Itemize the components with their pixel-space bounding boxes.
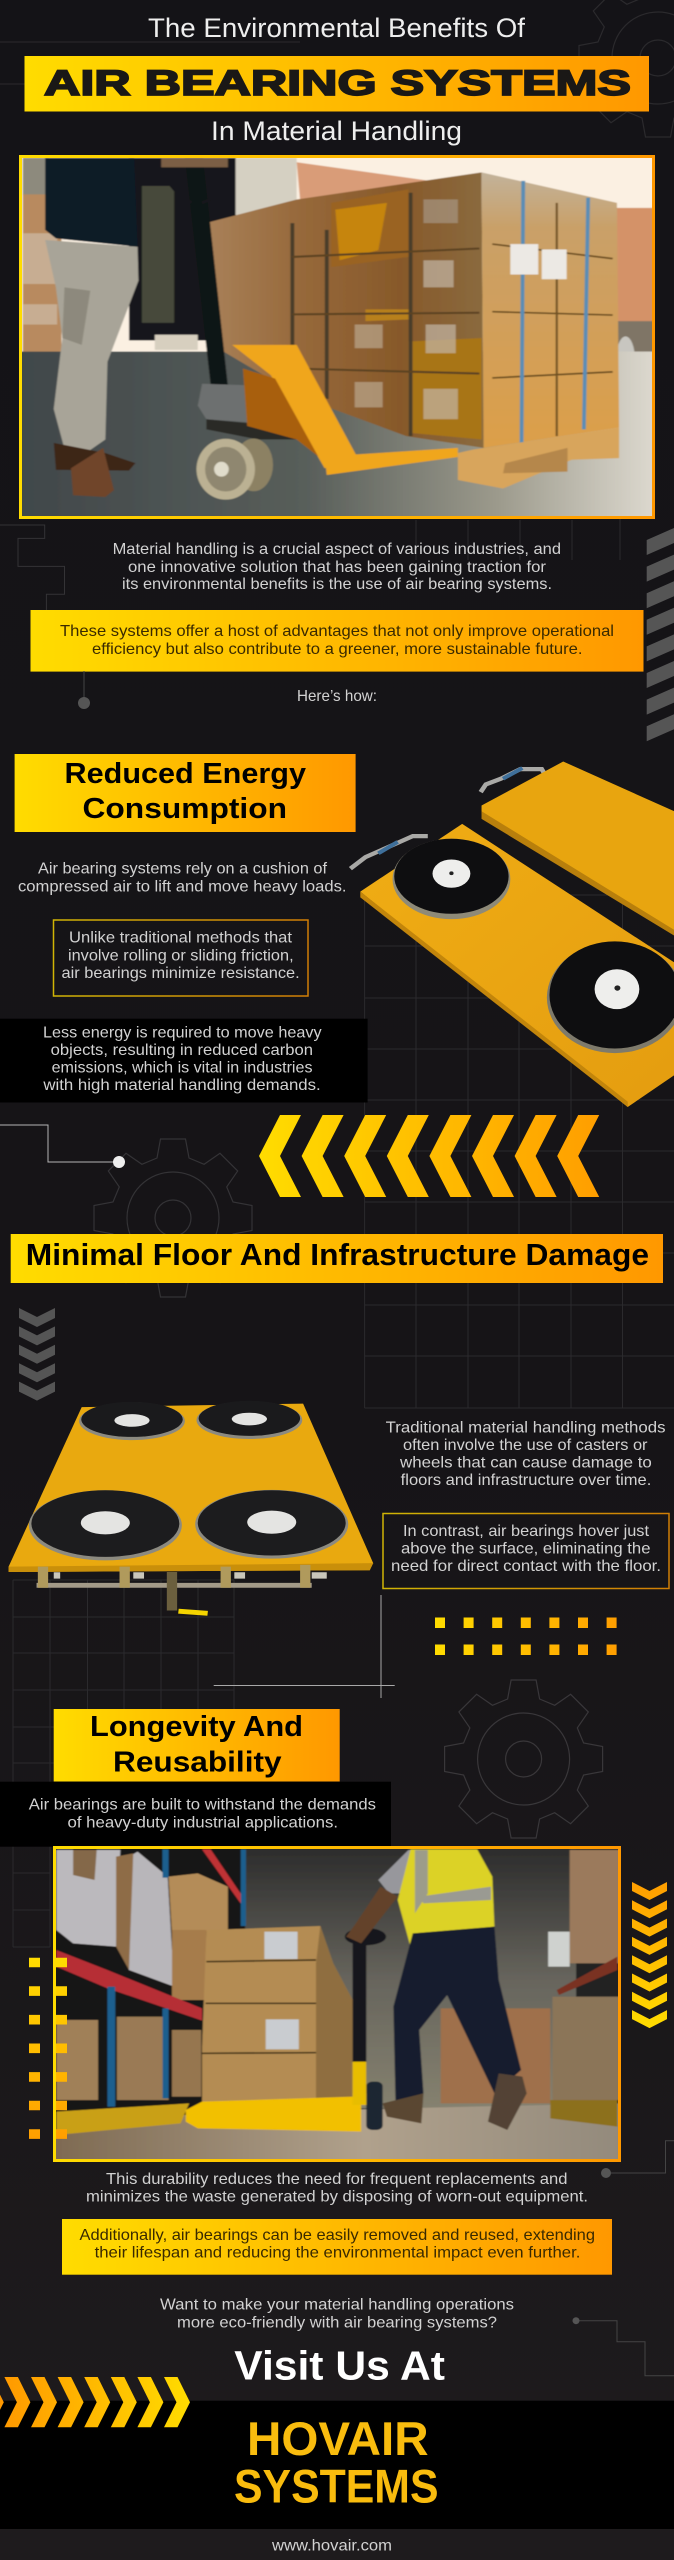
black band: brand: HOVAIR [247,2412,429,2465]
heading: reduced energy consumption: Consumption [82,793,287,825]
title line 1: The Environmental Benefits Of [148,13,526,43]
text: here's how: Here’s how: [297,688,377,705]
gear decoration: top right [579,0,674,137]
heading: longevity and reusability: Longevity And [90,1711,303,1743]
text: compressed air [18,861,346,896]
heading: longevity and reusability [54,1709,340,1782]
text: traditional methods: Traditional material handling methods [386,1419,666,1436]
text: call to action: more eco-friendly with air bearing systems? [177,2314,497,2331]
circuit decoration: top left [0,525,64,610]
outlined callout: hover above surface [383,1514,669,1588]
right-pointing chevrons [0,2377,190,2427]
heading banner: minimal floor damage [11,1234,663,1283]
heading: reduced energy consumption [15,754,356,832]
photo: worker with pallet jack and wrapped boxes [17,156,658,521]
outlined callout: friction: involve rolling or sliding friction, [68,948,294,964]
black panel: less energy: objects, resulting in reduced carbon [51,1042,313,1059]
black panel: heavy-duty: of heavy-duty industrial applications. [68,1814,338,1831]
black panel: less energy: emissions, which is vital in industries [52,1060,312,1077]
outlined callout: hover above surface: In contrast, air bearings hover just [403,1523,650,1540]
gear decoration: lower right [445,1680,603,1838]
highlight callout: reuse [62,2219,612,2275]
text: call to action: Want to make your material handling operations [160,2296,514,2313]
yellow square dots [435,1618,617,1655]
intro paragraph [113,541,561,593]
outlined callout: hover above surface: above the surface, eliminating the [401,1541,651,1558]
text: compressed air: compressed air to lift and move heavy loads. [18,879,346,896]
black band: brand: SYSTEMS [234,2460,438,2513]
text: compressed air: Air bearing systems rely on a cushion of [38,861,328,878]
highlight callout: advantages: efficiency but also contribute to a greener, more sustainable future. [92,641,582,658]
diagonal stripes: right edge [647,528,674,741]
gear decoration: middle left [94,1139,252,1297]
yellow square columns over photo [29,1958,67,2139]
heading: reduced energy consumption: Reduced Energy [64,758,306,790]
black panel: less energy: Less energy is required to move heavy [43,1024,322,1042]
title banner: AIR BEARING SYSTEMS [44,64,631,103]
left-pointing chevrons [259,1115,599,1197]
circuit line with white dot [0,1125,125,1168]
yellow down chevrons right [632,1882,667,2028]
black panel: heavy-duty [0,1782,391,1847]
image: two yellow air bearing plates [350,762,674,1107]
highlight callout: advantages: These systems offer a host of advantages that not only improve operational [60,623,614,640]
photo: worker pushing boxes in warehouse [54,1847,621,2163]
text: call to action [160,2296,514,2331]
text: traditional methods: floors and infrastructure over time. [401,1472,651,1489]
image: four-disc air bearing plate [9,1401,373,1613]
heading: visit us at: Visit Us At [234,2342,445,2388]
outlined callout: friction: air bearings minimize resistance. [62,965,300,982]
heading banner: minimal floor damage: Minimal Floor And Infrastructure Damage [26,1237,649,1272]
crosshair lines [214,1595,395,1698]
outlined callout: friction: Unlike traditional methods that [69,930,293,946]
text: traditional methods: often involve the use of casters or [403,1437,648,1454]
highlight callout: reuse: their lifespan and reducing the environmental impact even further. [95,2245,580,2262]
intro paragraph: its environmental benefits is the use of air bearing systems. [122,576,552,593]
title banner [24,56,649,112]
text: traditional methods [386,1419,666,1489]
circuit decoration with dot [78,671,90,709]
highlight callout: reuse: Additionally, air bearings can be easily removed and reused, extending [80,2227,595,2244]
circuit decoration: lower right 1 [601,2141,674,2178]
black panel: heavy-duty: Air bearings are built to withstand the demands [29,1796,376,1813]
outlined callout: friction [54,920,308,996]
heading: longevity and reusability: Reusability [113,1747,282,1779]
black panel: less energy [0,1019,368,1102]
text: traditional methods: wheels that can cause damage to [399,1454,652,1471]
black band: brand [0,2401,674,2529]
intro paragraph: Material handling is a crucial aspect of various industries, and [113,541,561,558]
black panel: less energy: with high material handling demands. [42,1077,321,1094]
title line 3: In Material Handling [211,116,462,146]
gray down chevrons [19,1308,55,1401]
intro paragraph: one innovative solution that has been gaining traction for [128,559,547,576]
highlight callout: advantages [30,610,644,672]
text: durability [86,2171,588,2206]
text: durability: minimizes the waste generated by disposing of worn-out equipment. [86,2189,588,2206]
circuit decoration: lower right 2 [572,2317,674,2376]
footer url: www.hovair.com [271,2538,392,2555]
outlined callout: hover above surface: need for direct contact with the floor. [391,1558,661,1575]
text: durability: This durability reduces the need for frequent replacements and [106,2171,568,2188]
background grid decoration [0,42,674,1947]
